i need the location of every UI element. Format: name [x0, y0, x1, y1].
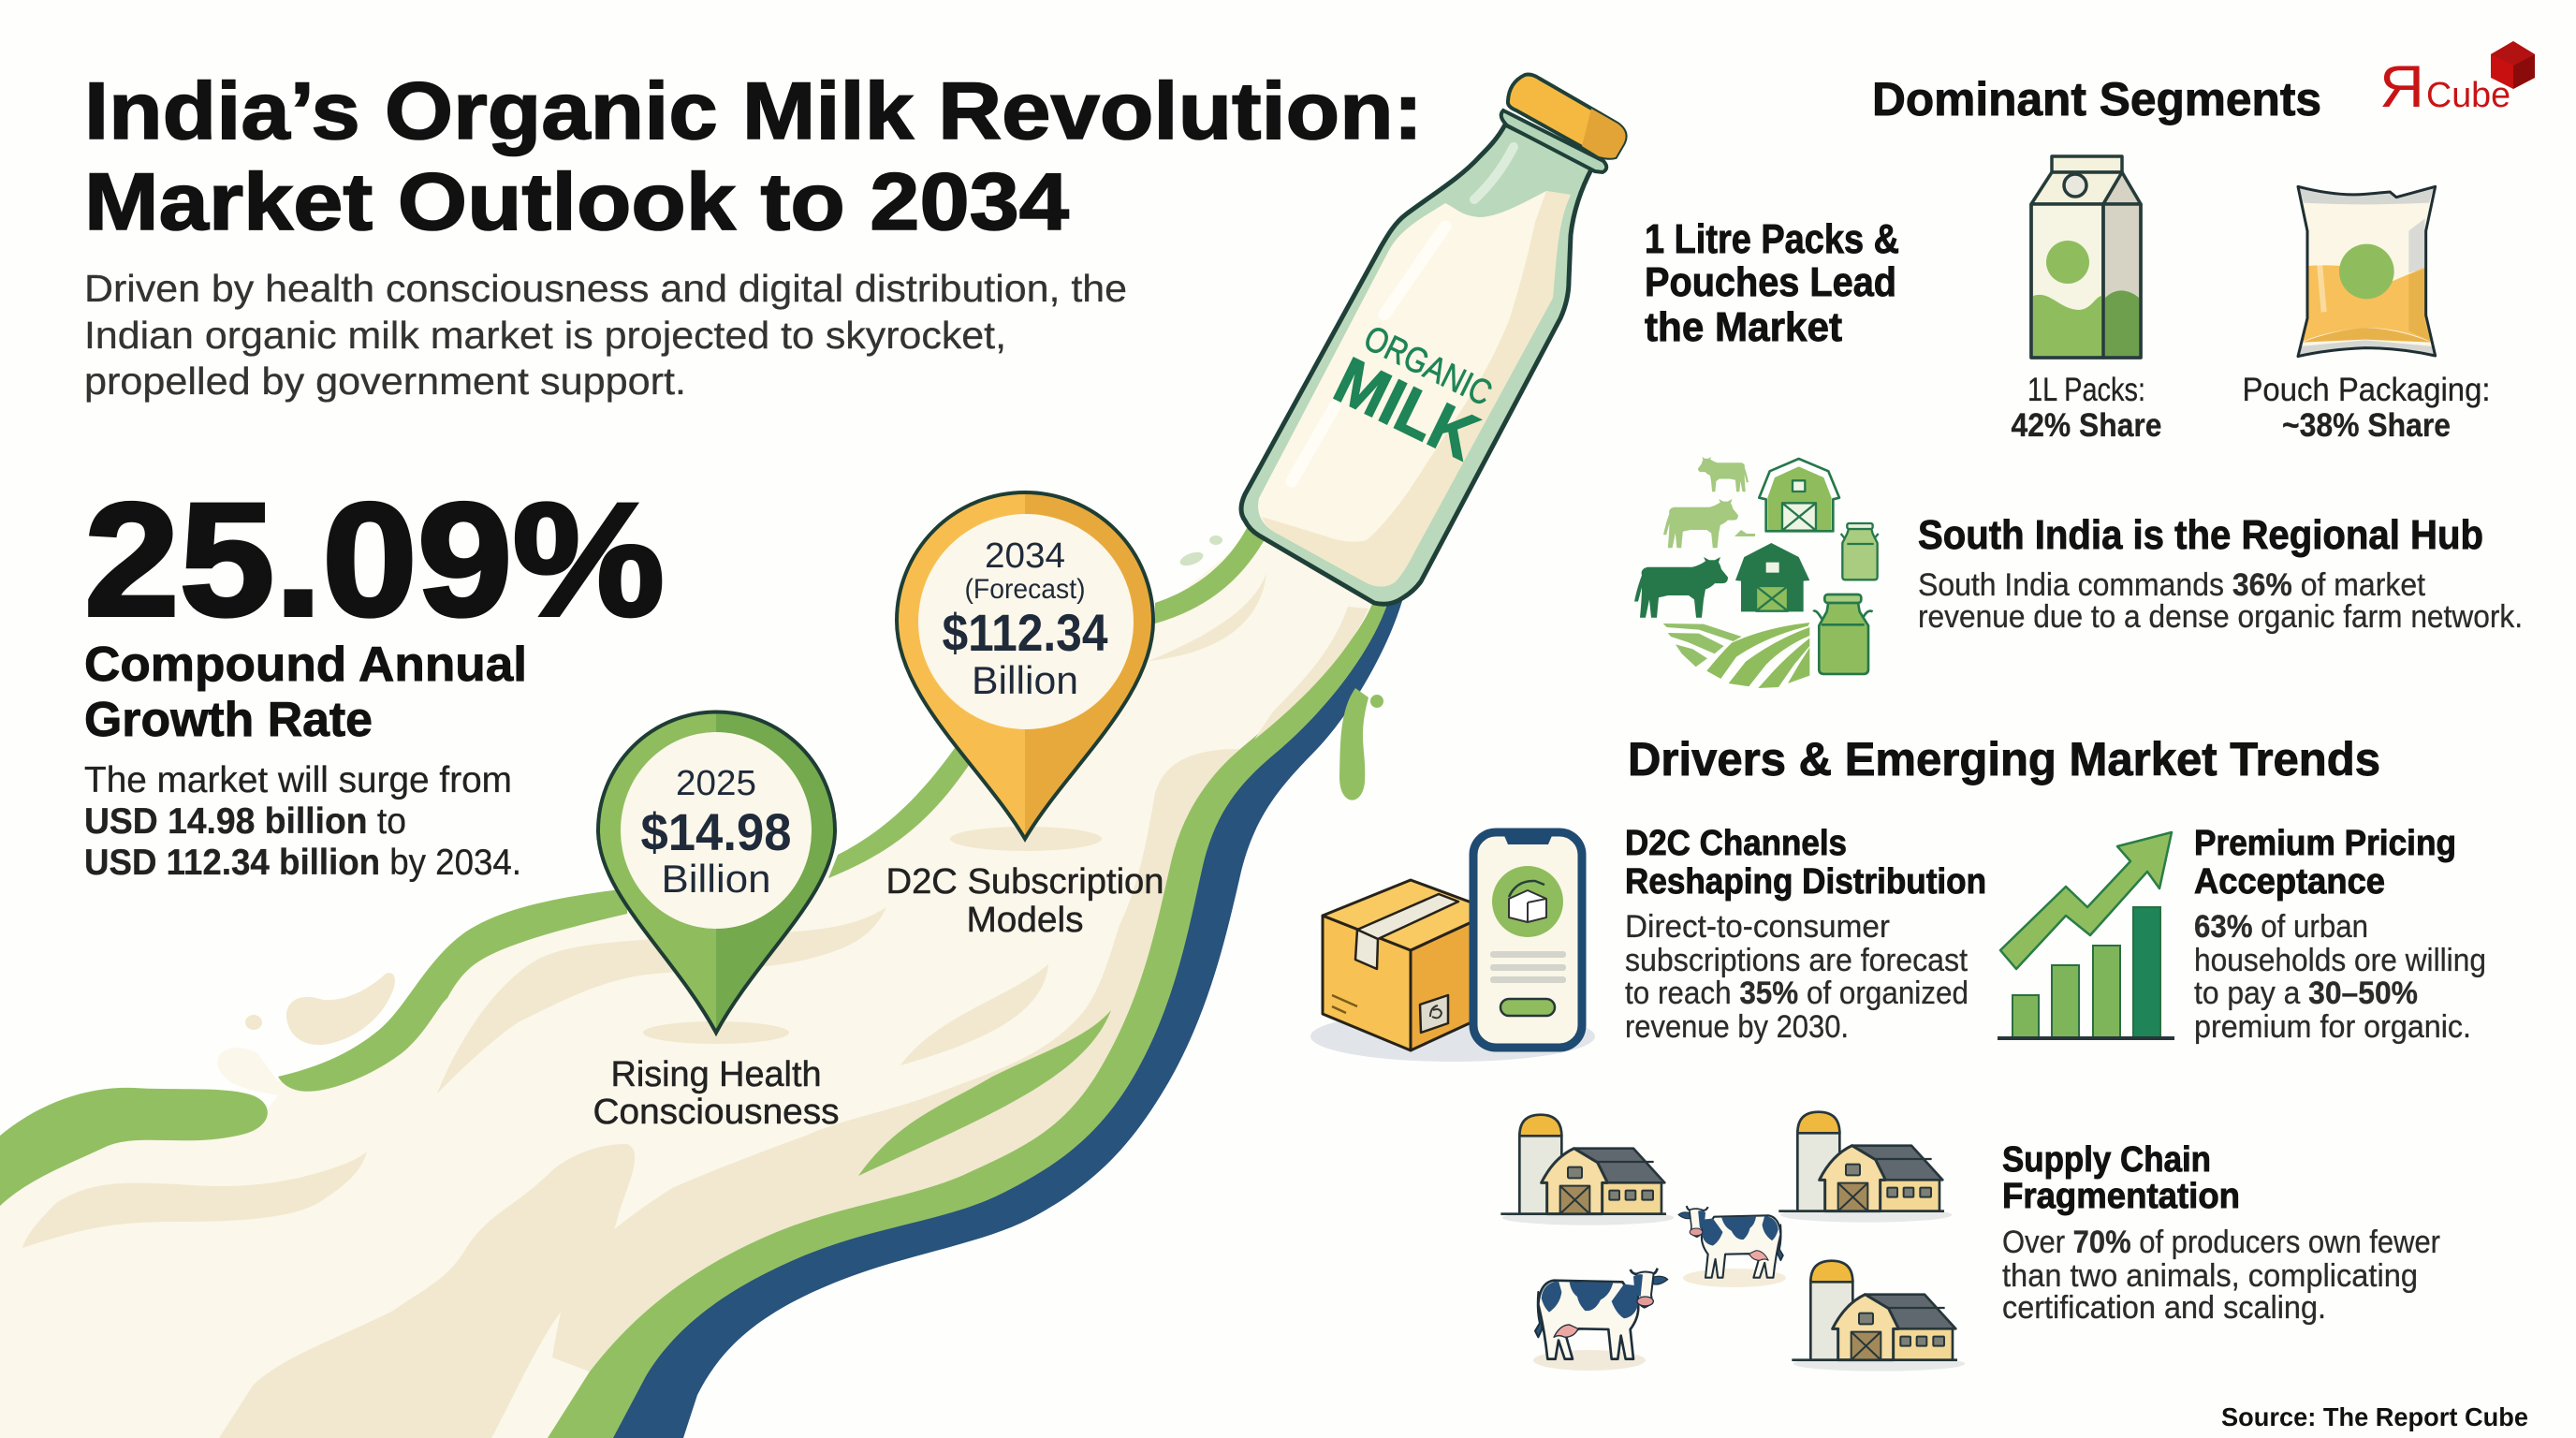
icon: milk carton: [2031, 156, 2141, 358]
text: south india description: South India commands 36% of market: [1918, 567, 2426, 603]
text: premium pricing: 63% of urban: [2194, 909, 2368, 945]
text: south india description: [1918, 567, 2523, 635]
pin: 2025: [598, 712, 835, 1044]
neck ring: [1501, 110, 1606, 172]
text: d2c channels: to reach 35% of organized: [1625, 976, 1969, 1011]
text: premium pricing: households ore willing: [2194, 943, 2486, 978]
text: premium pricing: premium for organic.: [2194, 1009, 2471, 1045]
small milk can: [1841, 523, 1879, 580]
logo: RCube: Cube: [2426, 76, 2510, 115]
pin: 2034: $112.34: [942, 603, 1108, 662]
heading: dominant segments: Dominant Segments: [1872, 73, 2321, 125]
pin: 2034: 2034: [985, 536, 1065, 576]
labels: packaging shares: ~38% Share: [2282, 407, 2451, 444]
labels: packaging shares: 1L Packs:: [2027, 372, 2145, 408]
label: d2c subscription: D2C Subscription: [886, 862, 1164, 902]
CAGR stat: [84, 470, 665, 747]
labels: packaging shares: 42% Share: [2011, 407, 2162, 444]
label: d2c subscription: Models: [966, 901, 1084, 940]
CAGR stat: Growth Rate: [84, 693, 373, 747]
pin: 2025: Billion: [661, 857, 771, 901]
pin: 2034: Billion: [972, 658, 1078, 702]
text: d2c channels: [1625, 824, 1986, 1045]
text: supply chain: [2002, 1140, 2440, 1326]
text: supply chain: than two animals, complicating: [2002, 1258, 2418, 1294]
icon: farm network: [1634, 457, 1879, 688]
bottle: [1241, 75, 1626, 604]
pin: 2025: 2025: [676, 764, 756, 803]
pin: 2025: $14.98: [640, 802, 792, 861]
text: supply chain: Fragmentation: [2002, 1177, 2240, 1216]
text: d2c channels: Direct-to-consumer: [1625, 909, 1890, 945]
milk ribbon flowing from bottle: [0, 521, 1404, 1438]
pin: 2034: [897, 492, 1153, 851]
labels: packaging shares: Pouch Packaging:: [2243, 372, 2490, 408]
heading: 1 litre packs: 1 Litre Packs &: [1645, 216, 1899, 262]
label: rising health: [593, 1055, 839, 1132]
CAGR description: USD 14.98 billion to: [84, 801, 406, 842]
green drip: [1339, 688, 1368, 800]
logo: RCube: Я: [2379, 54, 2424, 120]
heading: 1 litre packs: [1645, 216, 1899, 350]
text: south india description: revenue due to a dense organic farm network.: [1918, 599, 2523, 635]
CAGR stat: 25.09%: [84, 470, 665, 650]
text: d2c channels: subscriptions are forecast: [1625, 943, 1969, 978]
text: supply chain: certification and scaling.: [2002, 1290, 2326, 1326]
glass body: [1241, 125, 1592, 604]
label: rising health: Rising Health: [610, 1055, 822, 1094]
text: premium pricing: Acceptance: [2194, 862, 2385, 902]
text: supply chain: Over 70% of producers own fewer: [2002, 1225, 2440, 1260]
heading: 1 litre packs: the Market: [1645, 304, 1842, 350]
CAGR description: USD 112.34 billion by 2034.: [84, 843, 521, 883]
highlights: [1384, 227, 1445, 315]
text: premium pricing: [2194, 824, 2486, 1045]
subtitle: propelled by government support.: [84, 360, 686, 403]
top green band: [278, 521, 1264, 1092]
label: d2c subscription: [886, 862, 1164, 940]
cap: [1508, 75, 1626, 158]
cream shading on ribbon: [22, 573, 1368, 1438]
title: Market Outlook to 2034: [84, 157, 1069, 247]
subtitle: [84, 267, 1127, 403]
large milk can: [1813, 594, 1873, 674]
milk: [1258, 191, 1571, 587]
CAGR stat: Compound Annual: [84, 638, 527, 692]
icon: delivery box and phone: [1310, 831, 1595, 1062]
pin: 2034: (Forecast): [964, 574, 1086, 605]
text: d2c channels: D2C Channels: [1625, 824, 1847, 863]
CAGR description: [84, 760, 521, 883]
text: supply chain: Supply Chain: [2002, 1140, 2211, 1180]
title: India’s Organic Milk Revolution:: [84, 66, 1423, 156]
green lobe at left: [0, 1088, 268, 1206]
subtitle: Driven by health consciousness and digital distribution, the: [84, 267, 1127, 310]
icon: milk pouch: [2298, 186, 2436, 357]
heading: 1 litre packs: Pouches Lead: [1645, 259, 1896, 305]
label text: MILK: [1324, 344, 1489, 474]
title: [84, 66, 1423, 247]
heading: drivers and trends: Drivers & Emerging Market Trends: [1628, 733, 2380, 785]
label: rising health: Consciousness: [593, 1093, 839, 1132]
text: d2c channels: Reshaping Distribution: [1625, 862, 1986, 902]
subtitle: Indian organic milk market is projected to skyrocket,: [84, 314, 1006, 357]
text: premium pricing: to pay a 30–50%: [2194, 976, 2418, 1011]
text: d2c channels: revenue by 2030.: [1625, 1009, 1849, 1045]
heading: south india: South India is the Regional Hub: [1918, 512, 2483, 558]
icon: small farms and cows: [1500, 1112, 1965, 1372]
labels: packaging shares: [2011, 372, 2490, 444]
source: Source: The Report Cube: [2221, 1402, 2528, 1431]
text: premium pricing: Premium Pricing: [2194, 824, 2456, 863]
label text: ORGANIC: [1357, 318, 1498, 414]
logo: RCube: [2379, 41, 2535, 120]
green streak: [858, 1010, 1111, 1176]
CAGR description: The market will surge from: [84, 760, 512, 800]
milk shade: [1262, 191, 1571, 587]
chart: premium growth bars and arrow: [1998, 832, 2174, 1040]
